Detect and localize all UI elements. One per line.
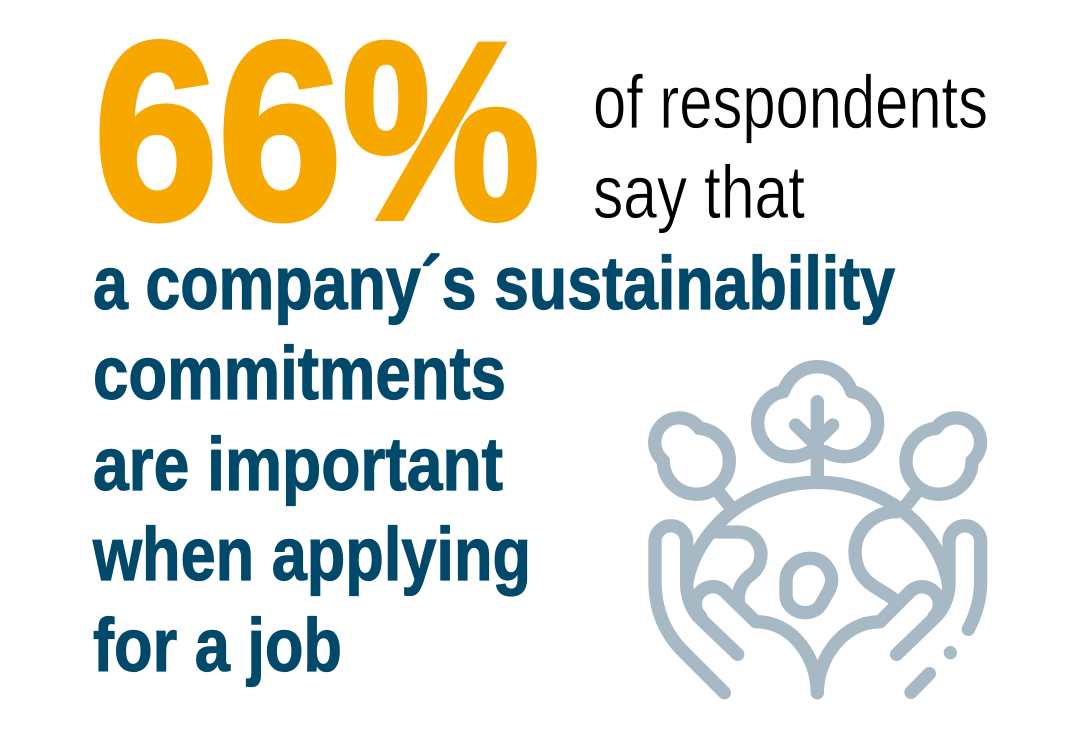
icon: hands holding globe with trees	[655, 367, 981, 693]
key message text: when applying	[92, 512, 531, 596]
key message text: for a job	[93, 603, 342, 687]
key message text	[92, 241, 895, 687]
icon: globe	[687, 482, 948, 613]
icon: right tree	[904, 418, 981, 508]
key message text: a company´s sustainability	[93, 241, 895, 325]
intro text	[593, 60, 988, 234]
intro text: say that	[593, 150, 805, 234]
icon: left hand	[655, 526, 817, 693]
icon: centre tree	[758, 367, 878, 482]
intro text: of respondents	[593, 60, 988, 144]
key message text: commitments	[93, 331, 506, 415]
icon: accent dot	[944, 646, 957, 659]
icon: left tree	[655, 418, 732, 508]
key message text: are important	[93, 422, 503, 506]
icon: right hand	[817, 526, 981, 693]
icon: accent dash	[911, 674, 929, 692]
